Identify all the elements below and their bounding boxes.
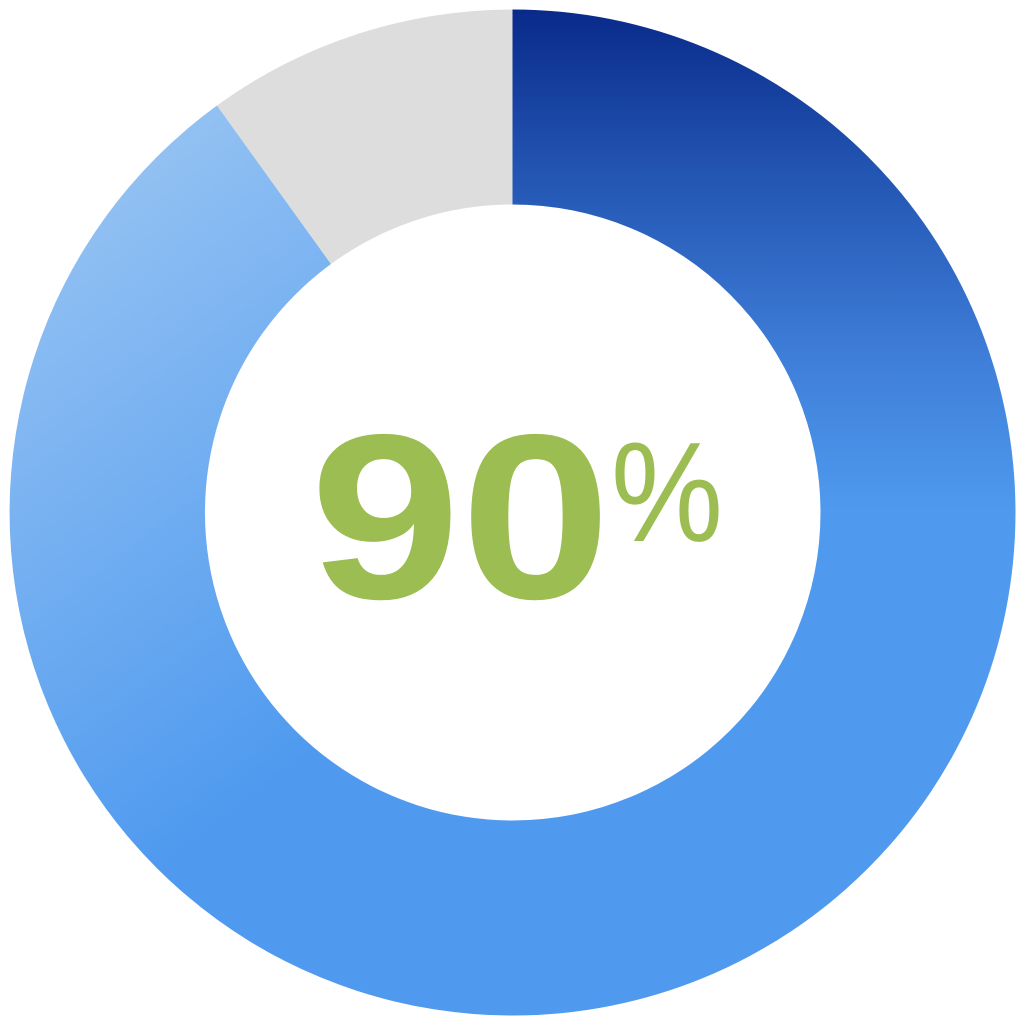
donut segment: solid mid blue (512, 512, 1016, 1016)
donut segment: dark blue gradient (512, 10, 1016, 512)
donut segment: light blue gradient (10, 106, 512, 1016)
percentage label (310, 385, 723, 648)
percent sign: % (611, 413, 723, 572)
number 90: 90 (310, 385, 611, 648)
donut segment: gray remainder (217, 10, 512, 264)
